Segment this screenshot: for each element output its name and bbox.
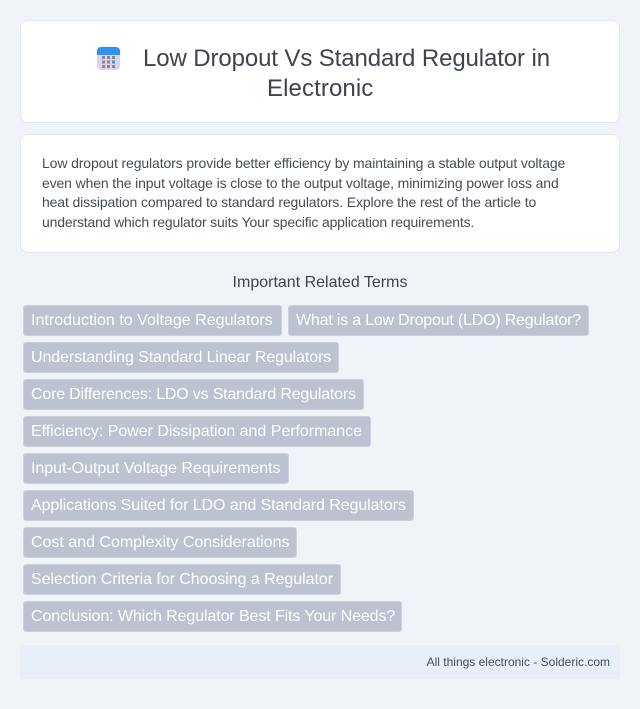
tag: Applications Suited for LDO and Standard Regulators: [31, 497, 406, 514]
tag: [23, 416, 371, 447]
text block: introduction: heat dissipation compared to standard regulators. Explore the rest of the article to: [42, 194, 536, 210]
panel: related term tags: [23, 305, 589, 632]
tag: Introduction to Voltage Regulators: [31, 312, 273, 329]
text block: introduction: understand which regulator suits Your specific application requirements.: [42, 214, 474, 230]
tag: Conclusion: Which Regulator Best Fits Your Needs?: [31, 608, 395, 625]
tag: [23, 564, 341, 595]
title: Electronic: [267, 75, 373, 102]
text block: introduction: even when the input voltage is close to the output voltage, minimizing power loss and: [42, 174, 559, 190]
icon: calendar: [97, 47, 120, 70]
tag: [23, 453, 289, 484]
tag: What is a Low Dropout (LDO) Regulator?: [296, 312, 581, 329]
tag: Core Differences: LDO vs Standard Regulators: [31, 386, 356, 403]
tag: Understanding Standard Linear Regulators: [31, 349, 331, 366]
tag: [23, 305, 282, 336]
text block: introduction: Low dropout regulators provide better efficiency by maintaining a stable output voltage: [42, 155, 565, 171]
tag: [23, 527, 297, 558]
tag: [288, 305, 589, 336]
text block: introduction: [42, 155, 565, 230]
tag: Cost and Complexity Considerations: [31, 534, 289, 551]
title: Low Dropout Vs Standard Regulator in: [143, 45, 550, 72]
panel: title header: [20, 20, 620, 123]
tag: Efficiency: Power Dissipation and Performance: [31, 423, 362, 440]
tag: [23, 490, 414, 521]
footer: All things electronic - Solderic.com: [427, 655, 610, 669]
heading: important related terms: Important Related Terms: [233, 274, 407, 291]
footer: [20, 645, 620, 679]
tag: Input-Output Voltage Requirements: [31, 460, 281, 477]
tag: [23, 601, 402, 632]
panel: introduction: [20, 134, 620, 253]
tag: [23, 379, 364, 410]
tag: Selection Criteria for Choosing a Regulator: [31, 571, 333, 588]
title: [143, 45, 550, 102]
tag: [23, 342, 339, 373]
